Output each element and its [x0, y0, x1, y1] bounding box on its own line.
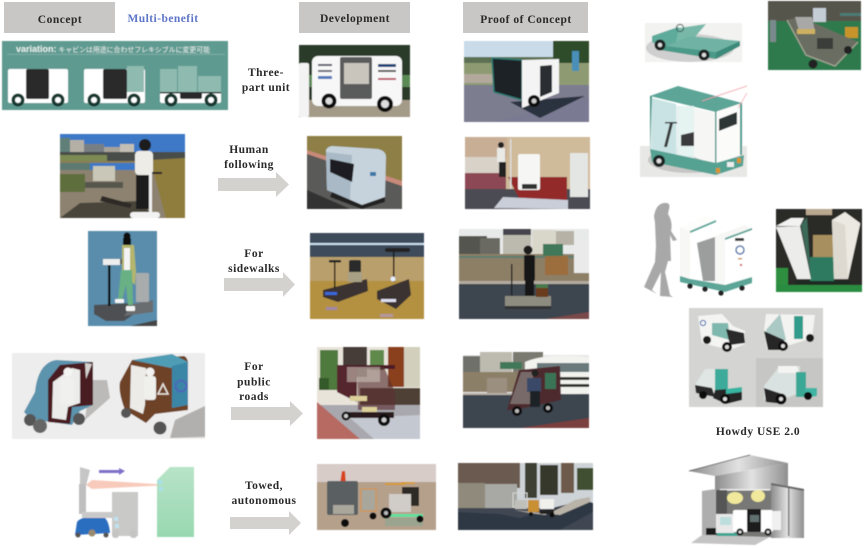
truck 1 — [8, 69, 68, 106]
label: Three-part unit: part unit — [242, 82, 290, 94]
label: Human following: following — [224, 159, 274, 171]
render 2 — [764, 314, 815, 351]
render 3 — [695, 369, 742, 404]
header: Development — [299, 2, 410, 33]
illustration: cabin vehicle with display — [640, 86, 747, 177]
photo: towed proof of concept — [458, 463, 593, 530]
heading: Multi-benefit: Multi-benefit — [127, 13, 199, 25]
silhouette — [644, 203, 677, 297]
label: For sidewalks: For — [244, 248, 264, 260]
truck 3 — [160, 66, 221, 106]
header: Proof of Concept: Proof of Concept — [480, 14, 572, 26]
variation caption: variation: キャビンは用途に合わせフレキシブルに変更可能 — [16, 44, 210, 54]
photo: human following development — [307, 136, 402, 209]
photo: human following proof of concept — [465, 137, 590, 209]
arrow: public roads — [231, 401, 303, 426]
illustration: public roads concept — [12, 353, 205, 439]
label: Howdy USE 2.0: Howdy USE 2.0 — [716, 426, 800, 438]
header: Proof of Concept — [463, 2, 588, 33]
render 1 — [698, 314, 745, 352]
label: For public roads: For — [244, 361, 264, 373]
label: For sidewalks: sidewalks — [228, 263, 280, 275]
label: For public roads: public — [237, 376, 271, 388]
photo: public roads development — [317, 347, 420, 439]
photo: public roads proof of concept — [463, 352, 589, 428]
motion arrow — [99, 468, 125, 475]
arrow: human following — [218, 172, 289, 197]
photo: towed development — [317, 464, 436, 530]
header: Concept — [4, 2, 115, 33]
illustration: container with vehicle — [689, 455, 804, 545]
photo: human following concept — [60, 134, 185, 218]
panel: variation concept trucks — [2, 41, 228, 110]
illustration: towed autonomous concept — [75, 467, 194, 538]
label: Three-part unit: Three- — [248, 67, 284, 79]
arrow: towed — [230, 511, 301, 535]
arrow: sidewalks — [224, 272, 295, 297]
illustration: green teal buggy — [645, 23, 742, 62]
header: Concept: Concept — [38, 14, 82, 26]
label: Human following: Human — [229, 144, 269, 156]
header: Development: Development — [320, 13, 390, 25]
illustration: silhouette and box vehicle — [644, 203, 752, 297]
photo grid: four vehicle renders — [689, 308, 823, 407]
photo: box vehicle frame — [776, 209, 862, 292]
photo: sidewalk development — [310, 233, 424, 319]
photo: workshop chassis — [768, 1, 861, 70]
sensing beam — [86, 480, 170, 489]
truck 2 — [84, 66, 145, 106]
render 4 — [764, 366, 817, 404]
illustration: sidewalk concept — [88, 231, 157, 326]
label: Towed, autonomous: Towed, — [245, 480, 283, 492]
label: Towed, autonomous: autonomous — [231, 495, 297, 507]
photo: three-part unit proof of concept — [464, 41, 589, 122]
photo: three-part unit development — [299, 45, 410, 117]
photo: sidewalk proof of concept — [459, 229, 589, 319]
label: For public roads: roads — [239, 391, 269, 403]
